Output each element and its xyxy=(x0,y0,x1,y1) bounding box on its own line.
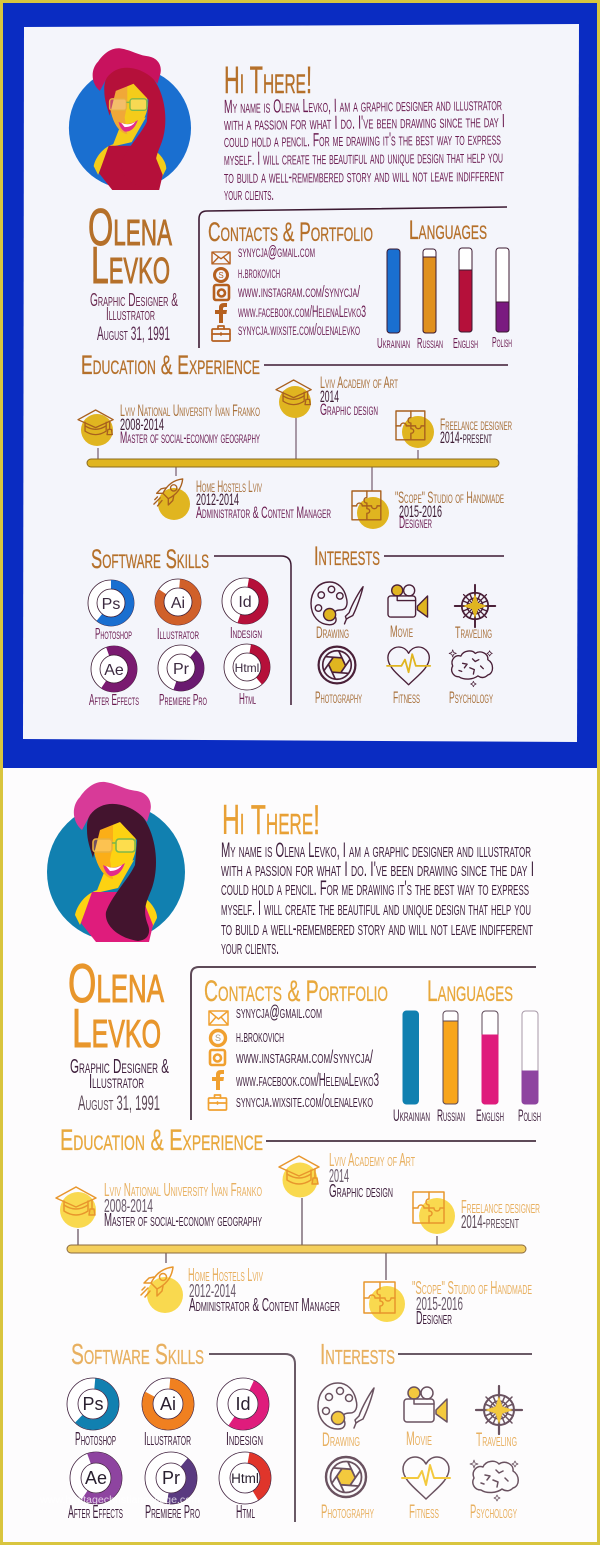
timeline: 2012-2014 xyxy=(189,1281,236,1301)
name and role: Levko xyxy=(72,997,161,1059)
contacts heading: Contacts & Portfolio xyxy=(204,975,388,1008)
language bars xyxy=(403,1011,538,1104)
name and role: Illustrator xyxy=(89,1071,144,1093)
interests heading: Interests xyxy=(320,1339,395,1371)
panel: flat resume artwork: Polish xyxy=(518,1106,541,1125)
ring labels: Indesign xyxy=(226,1429,263,1449)
timeline: 2014-present xyxy=(461,1212,519,1232)
interest labels: Fitness xyxy=(393,688,420,707)
interest labels xyxy=(315,622,493,707)
timeline: 2008-2014 xyxy=(104,1196,153,1216)
portrait illustration xyxy=(69,48,191,190)
contact list: h.brokovich xyxy=(238,263,280,282)
intro paragraph: your clients. xyxy=(224,184,274,205)
name and role: Olena xyxy=(68,952,164,1014)
contact list xyxy=(212,242,366,341)
greeting heading: Hi There! xyxy=(222,796,320,843)
ring labels: After Effects xyxy=(68,1502,123,1522)
language labels xyxy=(393,1106,541,1125)
watermark: www.heritagechristiancollege.com xyxy=(39,1495,200,1506)
greeting heading: Hi There! xyxy=(224,60,312,102)
language labels: Ukrainian xyxy=(393,1106,430,1125)
timeline: 2012-2014 xyxy=(196,490,239,509)
contact list: h.brokovich xyxy=(236,1026,284,1046)
ring labels: Ps xyxy=(82,1394,104,1414)
ring labels: Html xyxy=(231,1471,259,1486)
interest labels: Photography xyxy=(321,1502,374,1523)
software skills heading: Software Skills xyxy=(71,1339,204,1371)
ring labels: Illustrator xyxy=(144,1429,191,1449)
interest labels: Drawing xyxy=(316,623,349,642)
ring labels: After Effects xyxy=(89,692,139,709)
name and role: Graphic Designer & xyxy=(90,290,178,310)
education heading: Education & Experience xyxy=(60,1124,263,1157)
timeline: 2014-present xyxy=(440,428,492,447)
intro paragraph: your clients. xyxy=(221,936,279,959)
ring labels: Ae xyxy=(85,1468,107,1488)
name and role xyxy=(68,952,169,1115)
ring labels: Illustrator xyxy=(157,626,199,643)
contacts heading: Contacts & Portfolio xyxy=(208,217,373,247)
timeline: Lviv Academy of Art xyxy=(320,373,398,392)
portrait illustration xyxy=(47,782,185,942)
timeline: Graphic design xyxy=(329,1181,393,1201)
timeline: Freelance designer xyxy=(440,415,512,434)
intro paragraph xyxy=(224,94,505,205)
language labels: English xyxy=(453,335,478,352)
timeline: 2014 xyxy=(320,387,339,406)
timeline: 2008-2014 xyxy=(120,415,164,434)
interest labels: Movie xyxy=(406,1429,432,1450)
ring labels: Photoshop xyxy=(75,1429,116,1449)
languages heading: Languages xyxy=(427,975,513,1008)
timeline: 2014 xyxy=(329,1166,349,1186)
ring labels xyxy=(89,594,262,709)
panel: photographed resume mockup on blue: Polish xyxy=(492,334,512,351)
language labels: Russian xyxy=(437,1106,465,1125)
ring labels: Html xyxy=(236,1502,255,1522)
panel: flat resume artwork xyxy=(3,768,597,1542)
language labels: English xyxy=(476,1106,504,1125)
name and role: Levko xyxy=(91,237,170,295)
interest labels: Traveling xyxy=(455,623,492,642)
ring labels: Premiere Pro xyxy=(145,1502,200,1522)
timeline: Administrator & Content Manager xyxy=(196,503,331,522)
timeline: Lviv Academy of Art xyxy=(329,1150,415,1170)
contact list: www.instagram.com/synycja/ xyxy=(238,282,360,301)
contact list: synycja@gmail.com xyxy=(236,1002,322,1022)
ring labels: Premiere Pro xyxy=(159,692,207,709)
panel: photographed resume mockup on blue xyxy=(3,3,597,768)
software skill rings xyxy=(88,578,270,694)
ring labels: Html xyxy=(235,661,259,675)
intro paragraph xyxy=(221,839,534,959)
languages heading: Languages xyxy=(409,215,487,245)
timeline: Designer xyxy=(399,513,432,532)
contact list: synycja.wixsite.com/olenalevko xyxy=(236,1091,373,1111)
contact list: synycja.wixsite.com/olenalevko xyxy=(238,320,360,339)
frame line xyxy=(199,207,507,348)
language labels xyxy=(377,334,512,352)
name and role: August 31, 1991 xyxy=(78,1092,160,1115)
interest labels xyxy=(321,1429,517,1523)
name and role: Illustrator xyxy=(106,304,155,324)
ring labels: Pr xyxy=(162,1468,180,1488)
ring labels: Ae xyxy=(104,662,124,679)
name and role xyxy=(88,199,178,345)
ring labels: Photoshop xyxy=(95,626,132,643)
panel: flat resume artwork: Psychology xyxy=(470,1502,517,1523)
contact list: S xyxy=(215,1033,221,1043)
timeline: Home Hostels Lviv xyxy=(196,477,262,496)
ring labels: Id xyxy=(235,1394,251,1414)
interest icons xyxy=(311,582,495,687)
interests heading: Interests xyxy=(314,541,380,571)
timeline: Administrator & Content Manager xyxy=(189,1295,340,1315)
timeline: Master of social-economy geography xyxy=(104,1210,262,1230)
name and role: August 31, 1991 xyxy=(97,324,170,345)
timeline: Graphic design xyxy=(320,400,378,419)
ring labels: Indesign xyxy=(230,625,262,642)
frame line xyxy=(191,967,536,1120)
education heading: Education & Experience xyxy=(81,350,260,380)
ring labels: Ai xyxy=(160,1394,176,1414)
ring labels: Id xyxy=(238,594,252,611)
interest icons xyxy=(318,1383,522,1501)
timeline: Designer xyxy=(416,1308,452,1328)
timeline xyxy=(78,373,512,532)
ring labels xyxy=(68,1394,263,1522)
contact list: S xyxy=(218,271,224,280)
contact list xyxy=(208,1002,379,1111)
software skill rings xyxy=(67,1377,271,1507)
language bars xyxy=(387,248,509,333)
language labels: Russian xyxy=(417,335,443,352)
language labels: Ukrainian xyxy=(377,335,410,352)
contact list: www.facebook.com/HelenaLevko3 xyxy=(236,1070,379,1090)
timeline: Home Hostels Lviv xyxy=(188,1265,263,1285)
ring labels: Html xyxy=(239,691,256,708)
timeline: "Scope" Studio of Handmade xyxy=(395,488,504,507)
software skills heading: Software Skills xyxy=(91,544,209,574)
name and role: Olena xyxy=(88,199,172,257)
contact list: www.instagram.com/synycja/ xyxy=(236,1047,373,1067)
interest labels: Traveling xyxy=(476,1430,517,1451)
timeline: Lviv National University Ivan Franko xyxy=(120,401,260,420)
contact list: www.facebook.com/HelenaLevko3 xyxy=(238,302,366,321)
contact list: synycja@gmail.com xyxy=(238,242,315,261)
interest labels: Photography xyxy=(315,688,362,707)
interest labels: Movie xyxy=(390,622,413,641)
timeline: Master of social-economy geography xyxy=(120,428,260,447)
timeline xyxy=(56,1150,540,1328)
timeline: Lviv National University Ivan Franko xyxy=(104,1180,262,1200)
interest labels: Fitness xyxy=(409,1502,439,1523)
ring labels: Ai xyxy=(171,595,185,612)
name and role: Graphic Designer & xyxy=(70,1056,169,1078)
ring labels: Ps xyxy=(102,596,120,613)
timeline: 2015-2016 xyxy=(416,1294,463,1314)
ring labels: Pr xyxy=(173,661,190,678)
timeline: 2015-2016 xyxy=(399,502,442,521)
interest labels: Psychology xyxy=(449,688,493,707)
interest labels: Drawing xyxy=(322,1430,360,1451)
